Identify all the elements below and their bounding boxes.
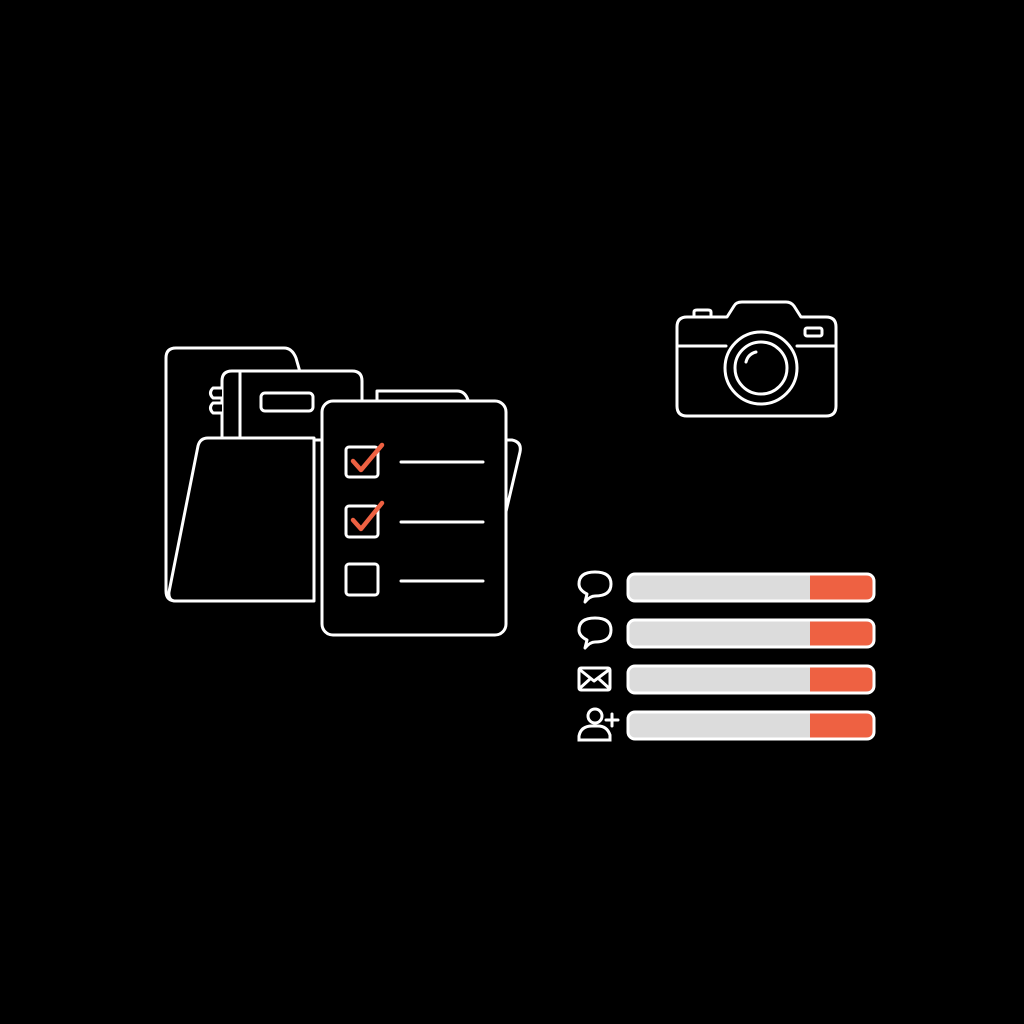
row 3 bbox=[579, 666, 874, 693]
chart: progress bars bbox=[579, 572, 874, 740]
row 2 bbox=[579, 618, 874, 648]
back folder bbox=[166, 348, 300, 601]
front folder flap bbox=[169, 438, 314, 601]
icon: camera bbox=[677, 302, 836, 416]
checkmarks bbox=[353, 445, 382, 529]
notebook bbox=[210, 371, 362, 440]
icon: folder with checklist bbox=[166, 348, 520, 635]
checklist sheet bbox=[322, 401, 506, 635]
back sheet bbox=[377, 391, 520, 600]
row 4 bbox=[579, 709, 874, 740]
row 1 bbox=[579, 572, 874, 602]
